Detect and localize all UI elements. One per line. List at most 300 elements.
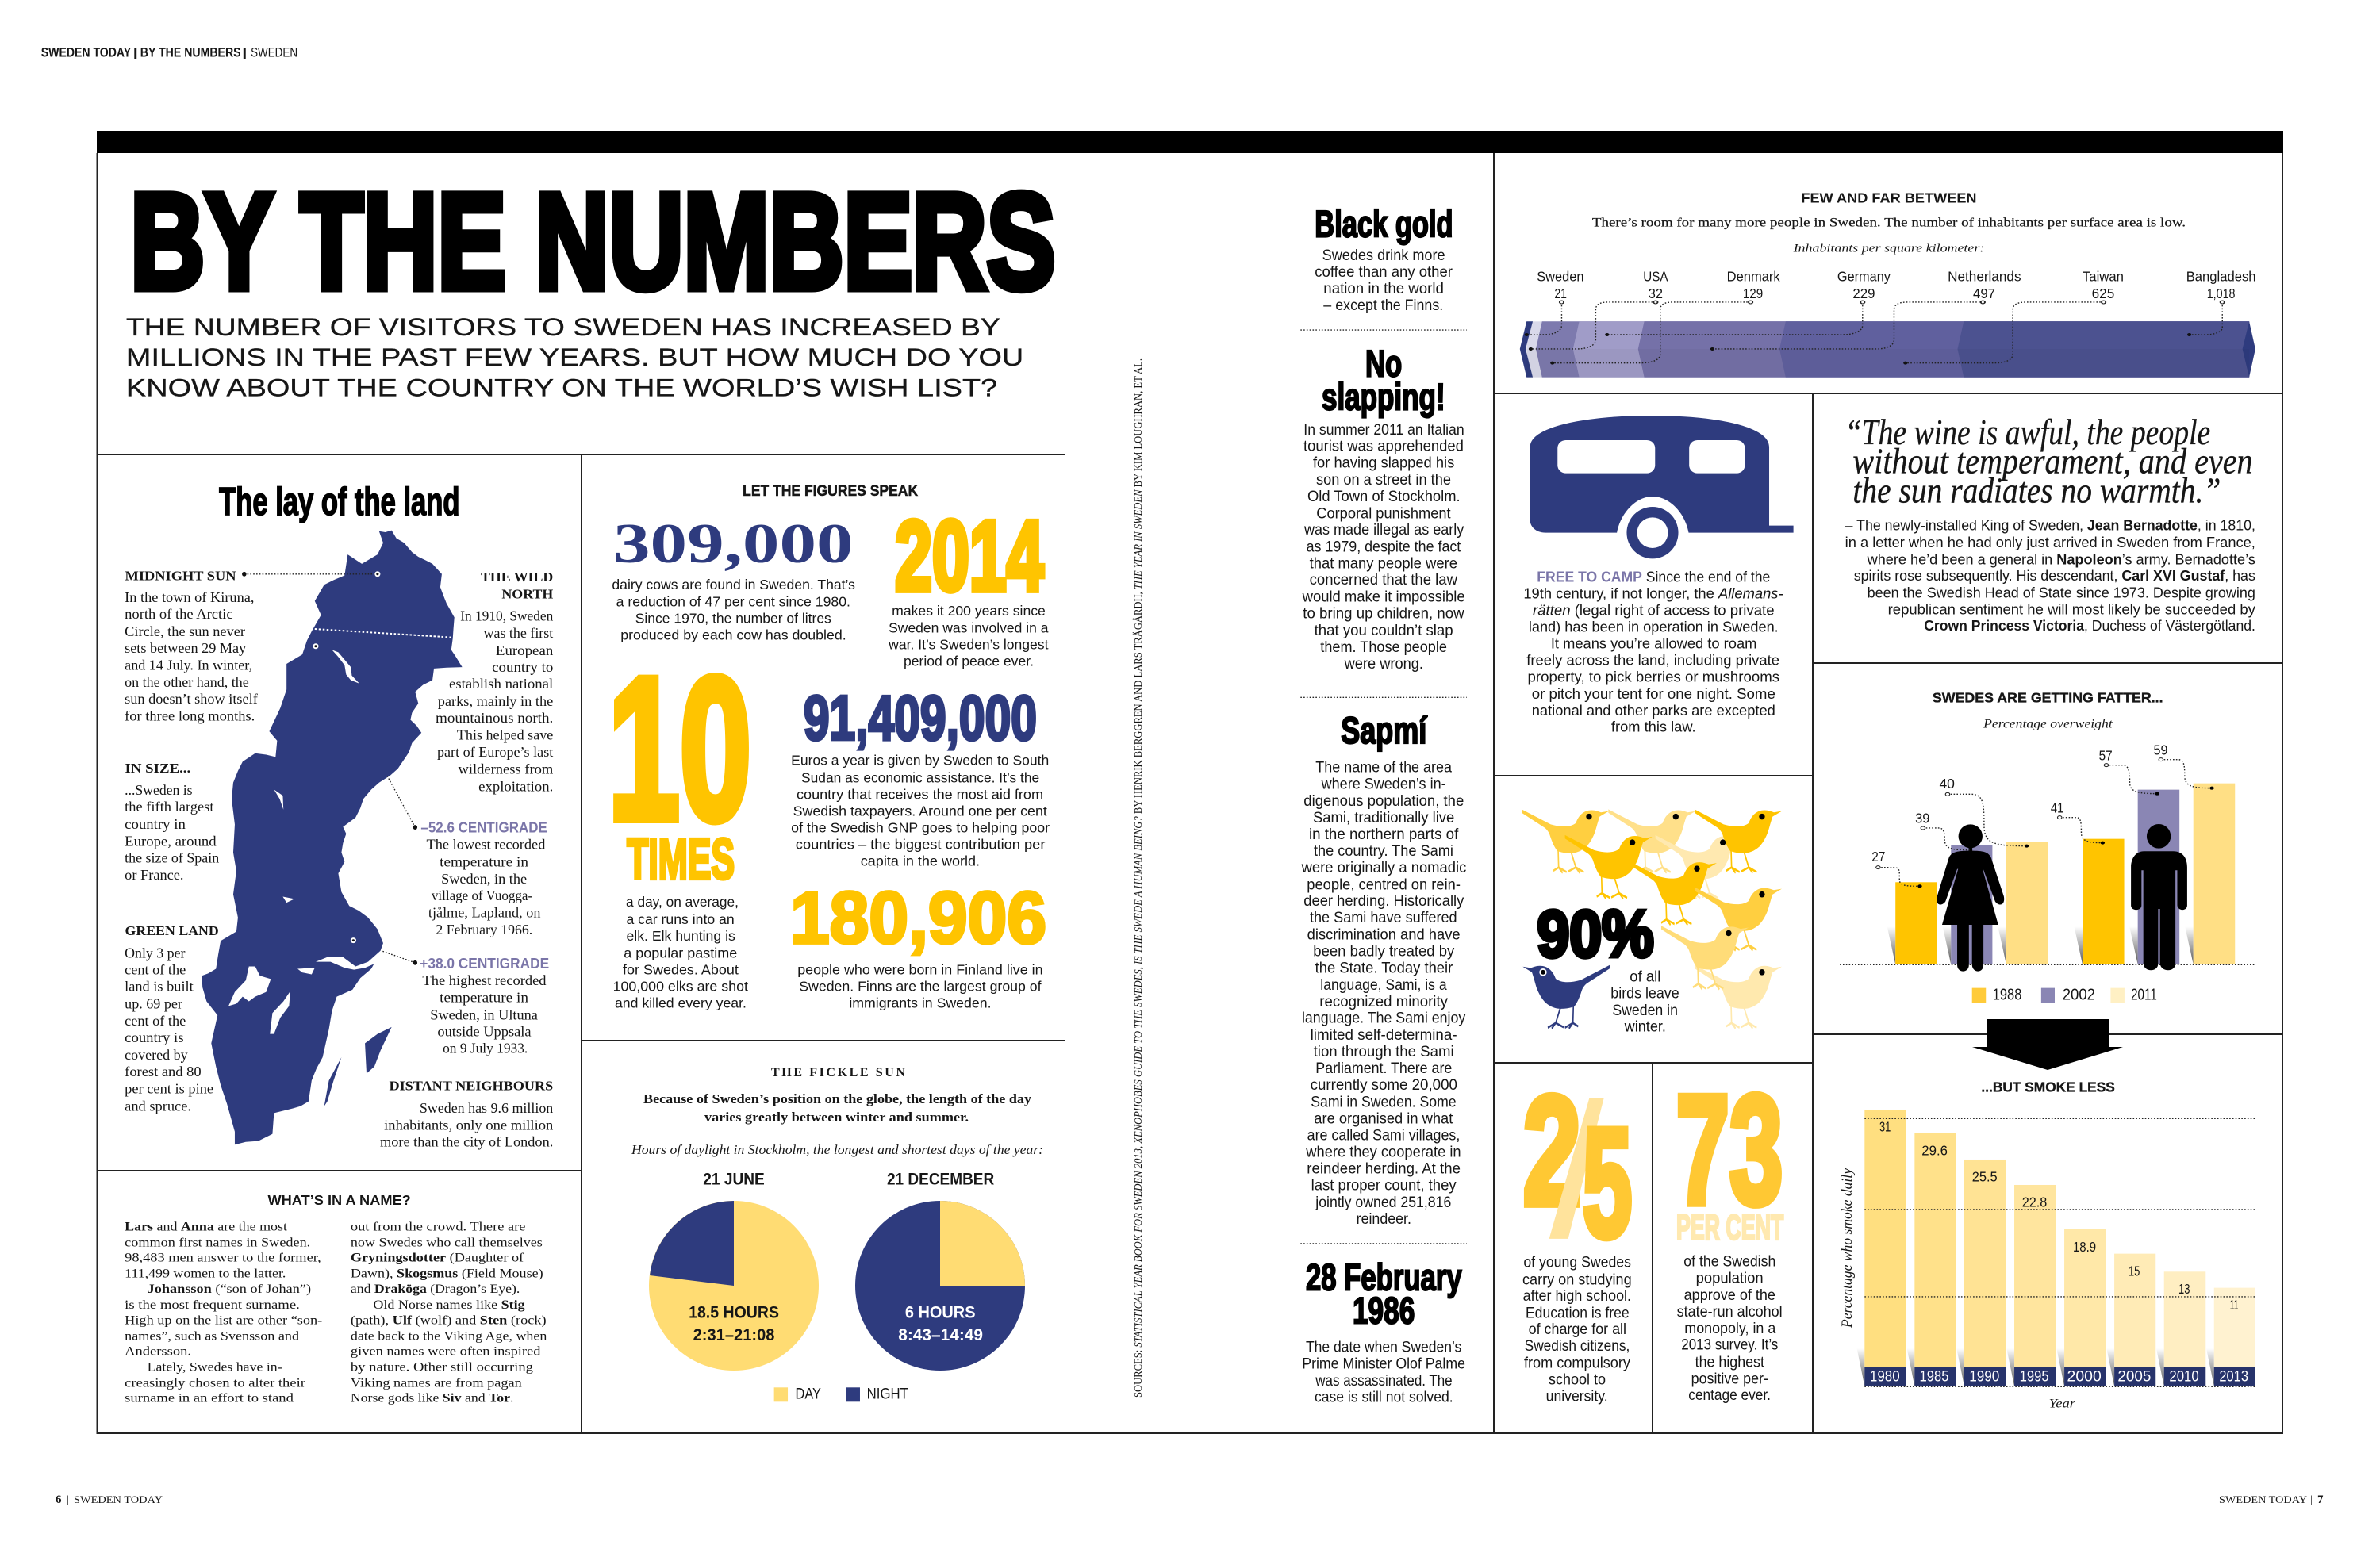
stat: 91,409,000: Euros a year is given by Sweden to South [791,754,1049,769]
panel: what's in a name [125,1192,547,1405]
column two: by nature. Other still occurring [351,1360,533,1374]
stat: 2/5 young Swedes: 2 [1523,1064,1581,1237]
item: black gold: nation in the world [1323,280,1444,297]
text: in size: the size of Spain [125,852,220,866]
text: the wild north: This helped save [457,729,554,743]
column one: Lars and Anna are the most [125,1220,287,1234]
value labels: 18.9 [2073,1239,2096,1255]
stat: 73 per cent: 2013 survey. It’s [1681,1336,1778,1354]
country labels: Germany [1837,269,1891,285]
stat: 90 per cent birds: birds leave [1610,984,1679,1002]
stat: 2/5 young Swedes: carry on studying [1522,1271,1632,1288]
stat: 2014: 2014 [895,500,1043,612]
stat: 2/5 young Swedes: university. [1546,1388,1608,1405]
value labels: 31 [1879,1119,1891,1134]
item: 28 February 1986: case is still not solved. [1315,1389,1453,1406]
legend: years: 1988 [1993,985,2021,1003]
text: highest temperature: on 9 July 1933. [443,1042,528,1056]
sapmi text continued: reindeer herding. At the [1307,1160,1461,1177]
text: green land: cent of the [125,1014,186,1029]
stat: 10 times: a popular pastime [624,946,737,961]
bar shadows [1857,1348,2214,1386]
column two: out from the crowd. There are [351,1220,525,1234]
axis label: percentage who smoke daily: Percentage who smoke daily [1839,1168,1856,1329]
sapmi text continued: are organised in what [1314,1110,1453,1127]
value labels: 59 [2154,742,2167,758]
text: in size: country in [125,818,186,832]
stat: 73 per cent: positive per- [1691,1371,1768,1387]
text: the wild north: European [496,644,554,659]
density leaders [1525,301,2225,365]
column one: names”, such as Svensson and [125,1329,299,1343]
text: green land: Only 3 per [125,946,185,961]
panel: birds, education, alcohol [1522,809,1784,1405]
panel: wine quote [1845,413,2255,634]
text: midnight sun: for three long months. [125,710,255,724]
column one: is the most frequent surname. [125,1298,300,1312]
sapmi text continued: language, Sami, is a [1320,976,1448,994]
value labels [1879,1119,2239,1313]
sapmi text start: The name of the area [1315,759,1452,776]
stat: 309,000 cows: a reduction of 47 per cent since 1980. [616,595,850,610]
text: date back to the Viking Age, when [351,1329,547,1343]
value labels: 15 [2129,1263,2140,1279]
stat: 2014: war. It’s Sweden’s longest [888,638,1049,653]
item: no slapping: would make it impossible [1301,588,1465,605]
value labels: 22.8 [2022,1194,2047,1210]
text: green land: GREEN LAND [125,925,219,939]
sapmi text start: digenous population, the [1303,792,1464,810]
text: the wild north: was the first [484,627,554,642]
running header: BY THE NUMBERS [140,45,241,59]
column one: 111,499 women to the latter. [125,1267,286,1280]
country labels: USA [1643,269,1668,285]
stat: 2014: makes it 200 years since [892,604,1046,619]
country labels: 625 [2092,286,2114,301]
sapmi text continued: the country. The Sami [1314,842,1453,860]
panel: few and far between [1520,190,2256,378]
intro text [126,312,1023,402]
text: highest temperature: +38.0 CENTIGRADE [420,957,549,972]
text: distant neighbours: Sweden has 9.6 million [420,1102,554,1117]
text: midnight sun [125,569,258,724]
stat: 91,409,000: capita in the world. [861,854,980,869]
text: midnight sun: MIDNIGHT SUN [125,569,236,584]
column two: Norse gods like Siv and Tor. [351,1391,513,1405]
text: distant neighbours: more than the city of London. [380,1136,553,1150]
stat: 10 times: 10 [608,635,751,861]
pie labels and legend: 21 JUNE [703,1169,765,1188]
year labels: 1990 [1969,1368,1999,1385]
stat: 91,409,000: Sudan as economic assistance. It’s the [801,771,1039,786]
sapmi text continued: Parliament. There are [1315,1060,1452,1077]
value labels: 57 [2099,748,2113,764]
country labels: 229 [1852,286,1875,301]
text: SWEDEN [251,45,298,59]
stat: 10 times: elk. Elk hunting is [626,930,735,944]
pie: 21 December [855,1201,1025,1371]
text: midnight sun: and 14 July. In winter, [125,659,252,673]
item: no slapping: were wrong. [1344,655,1423,673]
icon: yellow bird flock [1522,809,1782,1029]
sapmi text start [1303,759,1464,810]
icon: blue bird [1522,965,1610,1029]
sapmi text continued: the State. Today their [1315,960,1453,976]
column one: Johansson (“son of Johan”) [148,1282,311,1296]
column two: given names were often inspired [351,1344,541,1358]
heading: SWEDES ARE GETTING FATTER... [1933,690,2163,705]
value labels: 25.5 [1972,1169,1998,1184]
panel: the fickle sun: 8:43–14:49 [898,1325,983,1344]
column one: surname in an effort to stand [125,1391,294,1405]
stat: 309,000 cows: produced by each cow has doubled. [620,628,846,643]
quote attribution [1845,517,2255,634]
item: no slapping: son on a street in the [1316,471,1451,489]
text: green land: and spruce. [125,1099,191,1114]
text: midnight sun: In the town of Kiruna, [125,591,254,606]
sapmi text continued: reindeer. [1357,1210,1411,1228]
text: distant neighbours: inhabitants, only one million [384,1118,554,1133]
panel: Swedes are getting fatter [1840,690,2255,1003]
stat: 91,409,000: of the Swedish GNP goes to helping poor [791,821,1050,836]
column one: Lately, Swedes have in- [148,1360,282,1374]
text: the wild north: establish national [449,677,553,692]
heading and intro: Because of Sweden’s position on the globe, the length of the day [643,1091,1032,1106]
intro text: THE NUMBER OF VISITORS TO SWEDEN HAS INCREASED BY [126,312,1000,341]
year labels: 2000 [2067,1368,2102,1385]
stat: 180,906: people who were born in Finland live in [797,963,1043,978]
item: no slapping: Old Town of Stockholm. [1307,488,1461,505]
frame and panel rules [97,153,2282,1433]
text: green land: cent of the [125,963,186,978]
sapmi text continued: Sami, traditionally live [1313,809,1454,826]
footer left [56,1493,163,1506]
footer right: SWEDEN TODAY [2219,1493,2308,1505]
item: no slapping: as 1979, despite the fact [1307,539,1461,555]
text: midnight sun: Circle, the sun never [125,625,245,640]
text: the wild north: exploitation. [478,780,553,795]
stat: 91,409,000: 91,409,000 [804,683,1037,753]
value labels: 41 [2051,800,2063,816]
legend: years: 2011 [2131,985,2157,1003]
stat: 2/5 young Swedes: of charge for all [1529,1321,1626,1338]
item: no slapping: that you couldn’t slap [1315,622,1453,639]
sapmi text continued: last proper count, they [1311,1177,1457,1194]
stat: 180,906: Sweden. Finns are the largest group of [799,980,1042,995]
text: green land: per cent is pine [125,1083,213,1097]
value labels: 13 [2178,1281,2190,1297]
item: no slapping: No [1365,343,1402,385]
pie: 21 June [649,1201,819,1371]
year labels: 2005 [2117,1368,2151,1385]
footer right: | [2310,1494,2313,1506]
item: no slapping: that many people were [1310,555,1457,572]
stat: 309,000 cows: dairy cows are found in Sweden. That’s [612,578,855,593]
pie labels and legend: 18.5 HOURS [689,1302,779,1322]
running header: SWEDEN TODAY [41,45,131,59]
country labels: Taiwan [2082,269,2124,285]
text: green land: forest and 80 [125,1065,202,1080]
item: no slapping: tourist was apprehended [1303,438,1464,454]
stat: 73 per cent: the highest [1695,1354,1765,1371]
text: midnight sun: on the other hand, the [125,676,249,690]
column one: creasingly chosen to alter their [125,1376,305,1390]
text: green land: up. 69 per [125,997,182,1012]
heading: sapmi: Sapmí [1341,710,1427,752]
item: black gold: – except the Finns. [1323,297,1443,314]
value leaders [1876,758,2214,888]
stat: 2/5 young Swedes: from compulsory [1524,1355,1631,1371]
text: in size [125,762,220,883]
item: no slapping: In summer 2011 an Italian [1303,421,1464,439]
heading: LET THE FIGURES SPEAK [743,482,918,499]
pull quote [1845,413,2253,511]
panel: the fickle sun [631,1066,1043,1402]
value labels: 27 [1871,849,1885,865]
text: highest temperature: temperature in [440,991,529,1006]
item: black gold: coffee than any other [1315,263,1453,281]
year labels: 1985 [1920,1368,1949,1385]
stat: 73 per cent: of the Swedish [1683,1253,1775,1270]
legend: years: 2002 [2063,985,2095,1003]
item: no slapping: to bring up children, now [1303,605,1464,622]
stat: 91,409,000 [791,683,1050,869]
item: no slapping: Corporal punishment [1316,504,1451,522]
item: no slapping [1301,343,1465,673]
text: highest temperature: The highest recorded [422,974,547,989]
text: now Swedes who call themselves [351,1236,543,1249]
arrow: fatter to smoke less [1972,1019,2123,1070]
panel: what's in a name: WHAT’S IN A NAME? [267,1192,411,1208]
stat: 10 times: a car runs into an [626,913,735,927]
text: lowest temperature: tjålme, Lapland, on [428,906,541,921]
panel: the fickle sun: 6 HOURS [905,1302,975,1322]
panel: free to camp [1523,416,1794,734]
axis label: year: Year [2049,1396,2075,1410]
sapmi text continued: tion through the Sami [1314,1043,1454,1060]
text: free to camp: freely across the land, including private [1526,653,1779,669]
text: distant neighbours [380,1080,554,1150]
running header: | [132,46,139,59]
text: free to camp: or pitch your tent for one night. Some [1532,686,1775,702]
stat: 73 per cent: monopoly, in a [1684,1320,1775,1337]
column two: Old Norse names like Stig [373,1298,525,1312]
item: no slapping: slapping! [1322,377,1445,419]
text: free to camp: FREE TO CAMP Since the end of the [1537,569,1770,585]
text: highest temperature: outside Uppsala [437,1025,532,1040]
country labels: Sweden [1537,269,1583,285]
vertical sources credit: SOURCES: STATISTICAL YEAR BOOK FOR SWEDEN 2013, XENOPHOBES GUIDE TO THE SWEDES, IS THE SWEDE A HUMAN BEING? BY HENRIK BERGGREN AND LARS TRÄGÅRDH, THE YEAR IN SWEDEN BY KIM LOUGHRAN, ET AL. [1131,358,1145,1398]
stat: 10 times: and killed every year. [615,996,747,1011]
text: distant neighbours: DISTANT NEIGHBOURS [389,1080,554,1094]
stat: 309,000 cows [612,513,855,643]
item: 28 February 1986: The date when Sweden’s [1306,1339,1461,1355]
item: black gold [1315,204,1453,314]
stat: 2/5 young Swedes: Swedish citizens, [1525,1337,1630,1355]
year labels: 1980 [1870,1368,1900,1385]
stat: 10 times: TIMES [627,828,735,891]
text: midnight sun: north of the Arctic [125,608,233,623]
heading and intro [631,1066,1043,1157]
panel: but smoke less [1857,1079,2255,1410]
running header: | [241,46,248,59]
sapmi text continued: Sami in Sweden. Some [1311,1094,1457,1110]
pie labels and legend: DAY [796,1385,821,1402]
icon: woman [1937,824,2004,972]
column one: common first names in Sweden. [125,1236,310,1249]
text: free to camp: rätten (legal right of access to private [1533,602,1775,618]
stat: 91,409,000: Swedish taxpayers. Around one per cent [793,804,1047,819]
stat: 90 per cent birds: 90% [1537,896,1654,971]
text: the wild north: mountainous north. [436,711,553,727]
caption: Percentage overweight [1983,717,2113,730]
item: no slapping: them. Those people [1320,638,1447,656]
text: lowest temperature: –52.6 CENTIGRADE [420,820,547,836]
text: lowest temperature: 2 February 1966. [436,923,532,938]
title block [126,166,1055,402]
stat: 2014: period of peace ever. [904,654,1034,669]
overweight bar chart [1895,784,2235,964]
panel: what's in a name: 98,483 men answer to the former, [125,1251,321,1264]
country labels: Netherlands [1948,269,2021,285]
column two: and Draköga (Dragon’s Eye). [351,1282,520,1296]
text: lowest temperature: The lowest recorded [427,838,546,853]
panel: the lay of the land [125,480,554,1150]
text: the wild north: parks, mainly in the [438,695,554,710]
sapmi text continued: were originally a nomadic [1301,859,1466,876]
bar shadows [1887,926,2194,964]
text: highest temperature: Sweden, in Ultuna [430,1008,538,1023]
text: Bangladesh [2186,269,2256,285]
year labels [1864,1367,2255,1386]
stat: 10 times: for Swedes. About [623,963,739,978]
item: no slapping: for having slapped his [1313,454,1454,471]
country labels: 1,018 [2207,286,2236,301]
sapmi text continued: recognized minority [1319,993,1449,1010]
sapmi text continued: in the northern parts of [1309,826,1459,843]
item: black gold: Black gold [1315,204,1453,246]
item: 28 February 1986: Prime Minister Olof Palme [1302,1355,1465,1372]
stat: 73 per cent: PER CENT [1676,1208,1784,1247]
text: the wild north: THE WILD [481,571,553,585]
text: the wild north: part of Europe’s last [437,746,554,761]
text: the wild north: NORTH [501,588,553,602]
stat: 2/5 young Swedes: Education is free [1526,1305,1630,1321]
stat: 90 per cent birds: of all [1630,968,1660,986]
stat: 2014 [888,500,1049,669]
icon: caravan [1530,416,1794,558]
text: free to camp: land) has been in operation in Sweden. [1529,619,1779,635]
stat: 90 per cent birds: Sweden in [1612,1002,1678,1019]
stat: 73 per cent: centage ever. [1688,1386,1771,1404]
stat: 309,000 cows: Since 1970, the number of litres [635,612,831,627]
stat: 180,906 [790,878,1046,1011]
value labels: 11 [2230,1297,2239,1313]
stat: 73 per cent [1676,1064,1784,1404]
text: green land: covered by [125,1049,188,1064]
stat: 73 per cent: population [1696,1270,1764,1287]
sapmi text start: where Sweden’s in- [1321,776,1446,792]
stat: 2/5 young Swedes: after high school. [1523,1287,1631,1305]
stat: 180,906: 180,906 [790,878,1046,960]
heading: the lay of the land: The lay of the land [219,480,459,523]
stat: 10 times: a day, on average, [626,895,739,911]
stat: 90 per cent birds [1537,896,1679,1035]
column one [125,1220,322,1405]
text: green land: country is [125,1031,184,1046]
panel: the fickle sun: 21 DECEMBER [887,1169,994,1188]
panel: let the figures speak [608,482,1050,1011]
text: highest temperature [420,957,549,1056]
text: the wild north: country to [492,661,553,676]
item: 28 February 1986 [1302,1257,1465,1406]
value labels: 40 [1939,776,1955,792]
density bar [1520,321,2255,378]
sapmi text continued: limited self-determina- [1311,1026,1457,1044]
quote attribution: spirits rose subsequently. His descendant, Carl XVI Gustaf, has [1854,568,2255,584]
pie labels and legend [689,1169,994,1402]
pie labels and legend: NIGHT [867,1385,908,1402]
text: free to camp: 19th century, if not longer, the Allemans- [1523,585,1783,601]
text: lowest temperature: village of Vuogga- [432,889,532,904]
stat: 2/5 young Swedes: 5 [1583,1097,1632,1270]
heading and intro: varies greatly between winter and summer. [704,1110,969,1125]
text: in size: Europe, around [125,834,217,849]
item: black gold: Swedes drink more [1322,247,1445,264]
text: the wild north: wilderness from [458,762,554,777]
black top bar [97,131,2283,153]
column one: Andersson. [125,1344,191,1358]
text: lowest temperature: Sweden, in the [441,872,527,888]
stat: 2014: Sweden was involved in a [889,621,1049,636]
country labels: 129 [1743,286,1763,301]
country labels: Denmark [1727,269,1780,285]
item: no slapping: concerned that the law [1310,571,1457,589]
country labels: 21 [1554,286,1567,301]
text: the wild north [436,571,554,795]
text: in size: IN SIZE... [125,762,190,776]
sapmi text continued: where they cooperate in [1305,1144,1461,1160]
stat: 180,906: immigrants in Sweden. [849,996,992,1011]
stat: 309,000 cows: 309,000 [613,513,854,575]
year labels: 2013 [2219,1368,2248,1385]
text: midnight sun: sets between 29 May [125,642,247,657]
text: free to camp: It means you’re allowed to roam [1551,636,1756,652]
column: black gold, no slapping, sapmi [1300,204,1467,810]
country labels: 497 [1973,286,1995,301]
sapmi text continued: the Sami have suffered [1310,909,1457,926]
stat: 10 times [608,635,751,1011]
item: 28 February 1986: 1986 [1353,1290,1415,1332]
text: free to camp: from this law. [1611,719,1696,734]
stat: 2/5 young Swedes [1522,1064,1632,1405]
country labels: 32 [1649,286,1663,301]
pie labels and legend: 2:31–21:08 [693,1325,774,1344]
caption: Inhabitants per square kilometer: [1793,242,1984,255]
text: lowest temperature [420,820,547,938]
year labels: 2010 [2169,1368,2199,1385]
stat: 73 per cent: state-run alcohol [1677,1303,1783,1321]
text: lowest temperature: temperature in [440,855,529,870]
stat: 91,409,000: countries – the biggest contribution per [796,838,1046,853]
stat: 91,409,000: country that receives the most aid from [797,788,1043,803]
country labels [1537,269,2256,301]
text: green land [125,925,219,1114]
column two: Gryningsdotter (Daughter of [351,1251,524,1264]
column two [351,1220,547,1405]
sapmi text continued: been badly treated by [1313,943,1455,960]
sapmi text continued: currently some 20,000 [1311,1076,1457,1094]
